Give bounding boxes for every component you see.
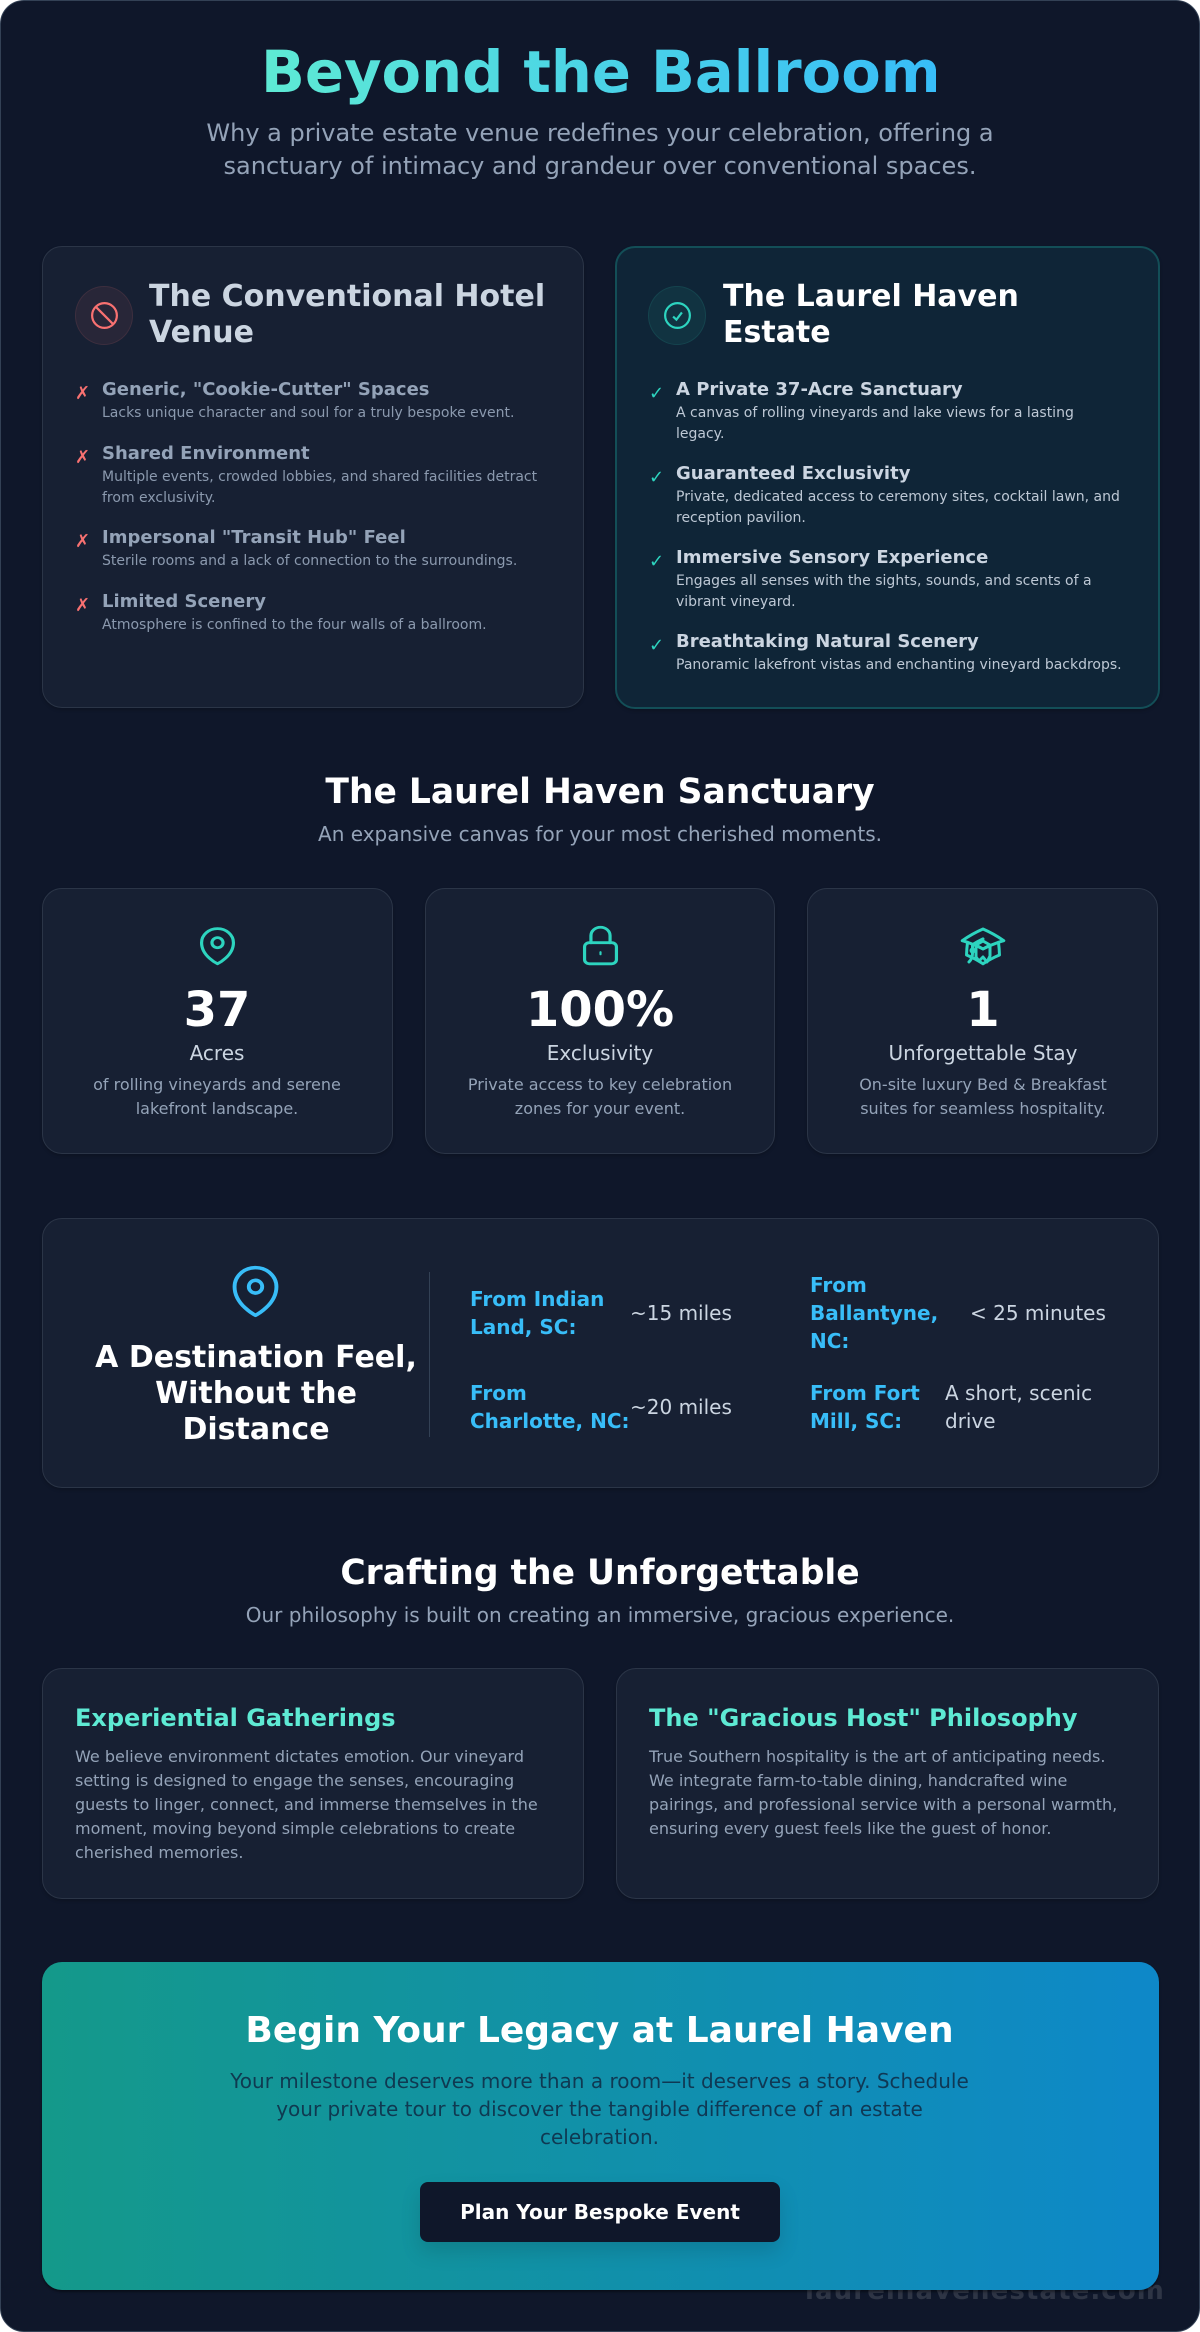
icon: lock	[582, 926, 618, 966]
panel: gracious host: We integrate farm-to-table dining, handcrafted wine	[649, 1770, 1067, 1790]
item: limited scenery: Limited Scenery	[102, 591, 266, 612]
section heading: sanctuary: The Laurel Haven Sanctuary	[325, 772, 875, 812]
subtitle: Why a private estate venue redefines your celebration, offering a	[206, 119, 994, 147]
heading: destination feel: A Destination Feel,	[95, 1340, 417, 1375]
route: fort mill: A short, scenic	[945, 1381, 1092, 1405]
item: limited scenery: Atmosphere is confined to the four walls of a ballroom.	[102, 617, 487, 633]
icon: pin	[200, 927, 235, 966]
stat text	[93, 982, 341, 1118]
item: transit hub: ✗	[75, 531, 90, 552]
item: generic spaces: Generic, "Cookie-Cutter" Spaces	[102, 379, 430, 400]
route: charlotte: Charlotte, NC:	[470, 1409, 630, 1433]
heading: conventional: Venue	[149, 315, 254, 350]
stat text: 100%	[526, 982, 674, 1038]
item: shared environment: Multiple events, crowded lobbies, and shared facilities detract	[102, 469, 537, 485]
item: generic spaces	[75, 379, 514, 421]
route: charlotte	[470, 1381, 732, 1433]
item: 37-acre sanctuary: legacy.	[676, 426, 724, 442]
cta text: your private tour to discover the tangible difference of an estate	[276, 2097, 923, 2121]
panel: conventional hotel venue	[42, 246, 584, 708]
route: fort mill: drive	[945, 1409, 996, 1433]
heading: laurel haven: Estate	[723, 315, 831, 350]
item: natural scenery	[649, 631, 1122, 673]
section heading: crafting: Our philosophy is built on creating an immersive, gracious experience.	[246, 1603, 954, 1627]
stat text: 1	[966, 982, 1000, 1038]
item: generic spaces: Lacks unique character and soul for a truly bespoke event.	[102, 405, 514, 421]
stat text: lakefront landscape.	[136, 1099, 298, 1118]
heading: destination feel: Without the	[155, 1376, 357, 1411]
panel: gracious host: pairings, and professional service with a personal warmth,	[649, 1794, 1117, 1814]
item: shared environment	[75, 443, 537, 506]
route: fort mill	[810, 1381, 1092, 1433]
item: 37-acre sanctuary: ✓	[649, 383, 664, 404]
item: shared environment: from exclusivity.	[102, 490, 215, 506]
cta heading: Begin Your Legacy at Laurel Haven	[245, 2010, 954, 2051]
stat card: exclusivity	[425, 888, 775, 1154]
item: generic spaces: ✗	[75, 383, 90, 404]
section heading: crafting: Crafting the Unforgettable	[340, 1553, 860, 1593]
panel: gracious host: The "Gracious Host" Philosophy	[649, 1704, 1077, 1732]
icon: cap	[960, 928, 1006, 966]
item: guaranteed exclusivity: reception pavilion.	[676, 510, 806, 526]
section heading: sanctuary	[318, 772, 882, 846]
stat text: 37	[184, 982, 250, 1038]
route: charlotte: From	[470, 1381, 527, 1405]
item: 37-acre sanctuary: A Private 37-Acre Sanctuary	[676, 379, 963, 400]
panel: experiential gatherings: setting is designed to engage the senses, encouraging	[75, 1770, 514, 1790]
panel: gracious host: True Southern hospitality is the art of anticipating needs.	[649, 1746, 1105, 1766]
item: guaranteed exclusivity: ✓	[649, 467, 664, 488]
stat card: acres	[42, 888, 393, 1154]
route: fort mill: Mill, SC:	[810, 1409, 902, 1433]
item: sensory experience: ✓	[649, 551, 664, 572]
route: ballantyne: < 25 minutes	[970, 1301, 1106, 1325]
stat card: stay	[807, 888, 1158, 1154]
panel: experiential gatherings: guests to linger, connect, and immerse themselves in the	[75, 1794, 538, 1814]
cta button	[420, 2182, 780, 2242]
route: charlotte: ~20 miles	[630, 1395, 732, 1419]
item: limited scenery: ✗	[75, 595, 90, 616]
panel: location	[42, 1218, 1159, 1488]
item: 37-acre sanctuary	[649, 379, 1074, 442]
panel: experiential gatherings: Experiential Gatherings	[75, 1704, 396, 1732]
stat text: Unforgettable Stay	[889, 1041, 1077, 1065]
route: indian land: From Indian	[470, 1287, 604, 1311]
icon: location pin	[232, 1266, 278, 1318]
stat text: Acres	[190, 1041, 244, 1065]
route: ballantyne: Ballantyne,	[810, 1301, 938, 1325]
item: limited scenery	[75, 591, 487, 633]
panel: call to action	[42, 1962, 1159, 2290]
panel: experiential gatherings: cherished memories.	[75, 1842, 243, 1862]
stat text: of rolling vineyards and serene	[93, 1075, 341, 1094]
watermark: laurelhavenestate.com	[805, 2276, 1165, 2306]
stat text: Private access to key celebration	[468, 1075, 732, 1094]
cta button: Plan Your Bespoke Event	[460, 2200, 740, 2224]
item: sensory experience: Engages all senses with the sights, sounds, and scents of a	[676, 573, 1092, 589]
heading: conventional	[149, 279, 545, 350]
icon: check circle	[648, 286, 706, 345]
item: shared environment: ✗	[75, 447, 90, 468]
cta text: Your milestone deserves more than a room—it deserves a story. Schedule	[230, 2069, 969, 2093]
item: transit hub: Sterile rooms and a lack of connection to the surroundings.	[102, 553, 517, 569]
panel: experiential gatherings: We believe environment dictates emotion. Our vineyard	[75, 1746, 524, 1766]
stat text: suites for seamless hospitality.	[860, 1099, 1106, 1118]
stat text: Exclusivity	[547, 1041, 653, 1065]
item: transit hub: Impersonal "Transit Hub" Feel	[102, 527, 406, 548]
heading: laurel haven	[723, 279, 1019, 350]
item: sensory experience: Immersive Sensory Experience	[676, 547, 988, 568]
item: natural scenery: Panoramic lakefront vistas and enchanting vineyard backdrops.	[676, 657, 1122, 673]
section heading: sanctuary: An expansive canvas for your most cherished moments.	[318, 822, 882, 846]
section heading: crafting	[246, 1553, 954, 1627]
panel: gracious host	[616, 1668, 1159, 1899]
heading: conventional: The Conventional Hotel	[149, 279, 545, 314]
title: Beyond the Ballroom	[261, 39, 941, 106]
divider	[429, 1272, 430, 1437]
stat text: On-site luxury Bed & Breakfast	[859, 1075, 1107, 1094]
item: sensory experience	[649, 547, 1092, 610]
panel: gracious host: ensuring every guest feels like the guest of honor.	[649, 1818, 1051, 1838]
item: guaranteed exclusivity	[649, 463, 1120, 526]
heading: destination feel: Distance	[182, 1412, 330, 1447]
route: ballantyne: From	[810, 1273, 867, 1297]
item: sensory experience: vibrant vineyard.	[676, 594, 796, 610]
cta text	[230, 2069, 969, 2149]
item: 37-acre sanctuary: A canvas of rolling vineyards and lake views for a lasting	[676, 405, 1074, 421]
stat text: zones for your event.	[515, 1099, 685, 1118]
cta text: celebration.	[540, 2125, 659, 2149]
panel: experiential gatherings: moment, moving beyond simple celebrations to create	[75, 1818, 515, 1838]
route: indian land: ~15 miles	[630, 1301, 732, 1325]
heading: laurel haven: The Laurel Haven	[723, 279, 1019, 314]
route: ballantyne	[810, 1273, 1106, 1353]
route: indian land	[470, 1287, 732, 1339]
panel: experiential gatherings	[42, 1668, 584, 1899]
route: ballantyne: NC:	[810, 1329, 849, 1353]
icon: prohibited	[75, 286, 133, 345]
stat text	[468, 982, 732, 1118]
route: fort mill: From Fort	[810, 1381, 920, 1405]
item: natural scenery: Breathtaking Natural Scenery	[676, 631, 979, 652]
stat text	[859, 982, 1107, 1118]
panel: laurel haven estate	[615, 246, 1160, 709]
route: indian land: Land, SC:	[470, 1315, 576, 1339]
item: guaranteed exclusivity: Private, dedicated access to ceremony sites, cocktail lawn, and	[676, 489, 1120, 505]
subtitle	[206, 119, 994, 180]
heading: destination feel	[95, 1340, 417, 1447]
item: shared environment: Shared Environment	[102, 443, 310, 464]
item: guaranteed exclusivity: Guaranteed Exclusivity	[676, 463, 910, 484]
item: natural scenery: ✓	[649, 635, 664, 656]
subtitle: sanctuary of intimacy and grandeur over conventional spaces.	[224, 152, 976, 180]
item: transit hub	[75, 527, 517, 569]
